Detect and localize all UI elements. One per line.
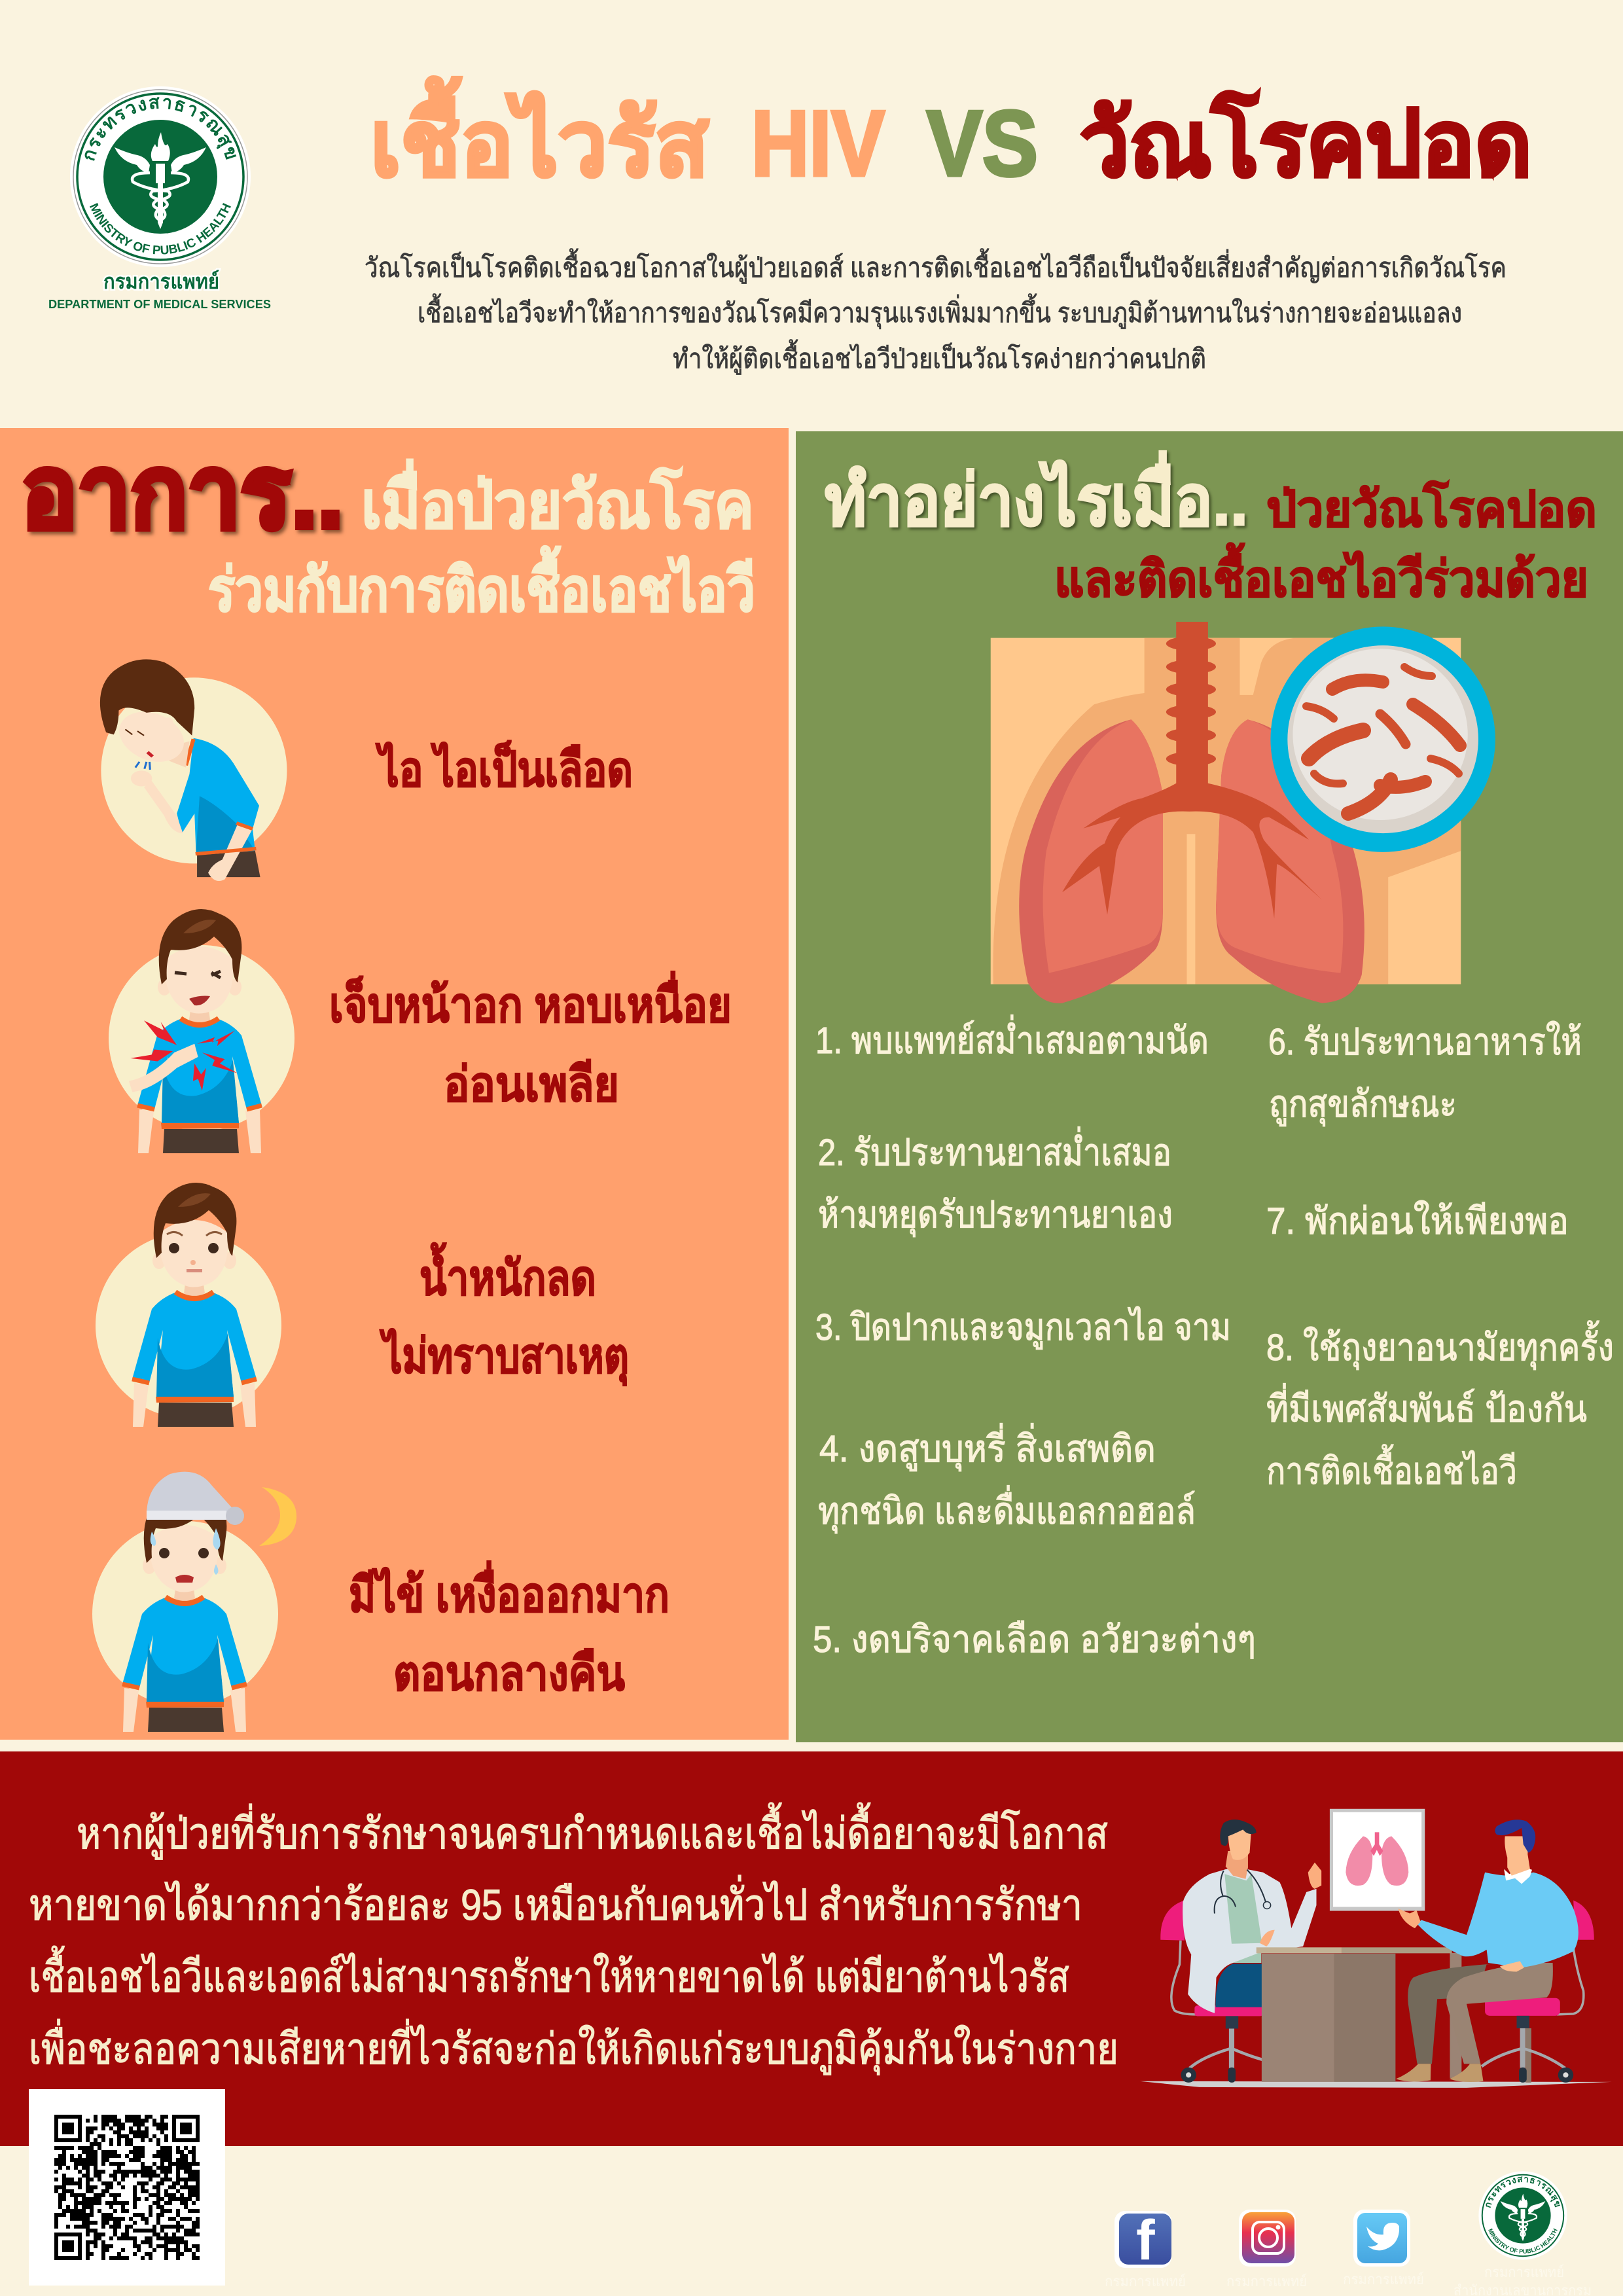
symptom: night sweats and fever: มีไข้ เหงื่อออกมาก [349, 1560, 669, 1622]
icon: twitter [1353, 2210, 1410, 2267]
symptom: night sweats and fever [349, 1560, 669, 1700]
icon: facebook [1115, 2209, 1171, 2272]
icon: facebook: f [1136, 2209, 1155, 2272]
step 8: การติดเชื้อเอชไอวี [1266, 1444, 1517, 1492]
treatment text: เชื้อเอชไอวีและเอดส์ไม่สามารถรักษาให้หายขาดได้ แต่มียาต้านไวรัส [29, 1946, 1069, 2001]
step 7: 7. พักผ่อนให้เพียงพอ [1266, 1200, 1569, 1242]
bacteria [1306, 667, 1460, 814]
desk [1257, 1947, 1461, 2082]
symptom: weight loss: ไม่ทราบสาเหตุ [379, 1327, 629, 1386]
intro text: ทำให้ผู้ติดเชื้อเอชไอวีป่วยเป็นวัณโรคง่ายกว่าคนปกติ [673, 339, 1206, 375]
title: HIV [751, 92, 885, 196]
treatment text: เพื่อชะลอความเสียหายที่ไวรัสจะก่อให้เกิดแก่ระบบภูมิคุ้มกันในร่างกาย [29, 2019, 1118, 2075]
title: เชื้อไวรัส [370, 77, 709, 195]
intro text: เชื้อเอชไอวีจะทำให้อาการของวัณโรคมีความรุนแรงเพิ่มมากขึ้น ระบบภูมิต้านทานในร่างกายจะอ่อนแอลง [418, 293, 1462, 329]
symptoms heading: ร่วมกับการติดเชื้อเอชไอวี [208, 546, 755, 624]
department name thai: กรมการแพทย์ [103, 270, 219, 293]
step 6: ถูกสุขลักษณะ [1269, 1083, 1457, 1127]
step 2: ห้ามหยุดรับประทานยาเอง [818, 1194, 1173, 1238]
illustration: doctor and patient [1140, 1809, 1612, 2088]
caption: instagram: กรมการแพทย์ [1226, 2273, 1307, 2289]
step 5: 5. งดบริจาคเลือด อวัยวะต่างๆ [813, 1619, 1256, 1660]
icon: night sweat boy [92, 1472, 296, 1732]
symptoms heading [21, 436, 755, 624]
QR code [29, 2089, 225, 2286]
treatment text: หายขาดได้มากกว่าร้อยละ 95 เหมือนกับคนทั่วไป สำหรับการรักษา [29, 1875, 1082, 1929]
footer logo [1479, 2172, 1567, 2259]
intro text [365, 248, 1507, 375]
symptom: weight loss: น้ำหนักลด [419, 1242, 596, 1305]
footer logo: กระทรวงสาธารณสุข [1486, 2176, 1560, 2208]
panel: treatment band [0, 1751, 1623, 2146]
symptom: night sweats and fever: ตอนกลางคืน [393, 1646, 625, 1700]
icon: coughing boy [100, 659, 287, 881]
patient [1396, 1820, 1578, 2082]
step 2 [818, 1126, 1173, 1238]
patient chair [1482, 1900, 1594, 2083]
intro text: วัณโรคเป็นโรคติดเชื้อฉวยโอกาสในผู้ป่วยเอดส์ และการติดเชื้อเอชไอวีถือเป็นปัจจัยเสี่ยงสำคัญต่อการเกิดวัณโรค [365, 248, 1507, 284]
step 4: 4. งดสูบบุหรี่ สิ่งเสพติด [819, 1423, 1156, 1472]
step 1: 1. พบแพทย์สม่ำเสมอตามนัด [815, 1014, 1209, 1062]
title: วัณโรคปอด [1080, 91, 1532, 195]
footer logo caption: กรมการแพทย์ [1484, 2264, 1564, 2280]
title [370, 77, 1532, 196]
treatment text [29, 1803, 1118, 2075]
symptom: weight loss [379, 1242, 629, 1386]
panel: symptoms [0, 428, 789, 1740]
what to do heading: ป่วยวัณโรคปอด [1266, 480, 1597, 537]
symptoms heading: อาการ.. [21, 436, 344, 550]
caption: facebook: กรมการแพทย์ [1105, 2273, 1186, 2289]
doctor chair [1160, 1900, 1263, 2083]
step 4 [818, 1423, 1196, 1534]
icon: moon [259, 1487, 296, 1546]
department name english: DEPARTMENT OF MEDICAL SERVICES [48, 298, 271, 311]
step 2: 2. รับประทานยาสม่ำเสมอ [818, 1126, 1171, 1174]
symptoms heading: เมื่อป่วยวัณโรค [361, 459, 754, 542]
symptom: chest pain: อ่อนเพลีย [444, 1057, 619, 1111]
title: VS [927, 92, 1038, 196]
step 4: ทุกชนิด และดื่มแอลกอฮอล์ [818, 1485, 1196, 1534]
department logo [70, 86, 251, 267]
what to do heading [825, 451, 1597, 607]
panel: what to do [796, 431, 1623, 1742]
step 8 [1266, 1321, 1614, 1492]
icon: instagram [1239, 2210, 1296, 2267]
symptom: chest pain: เจ็บหน้าอก หอบเหนื่อย [329, 971, 732, 1032]
doctor [1183, 1820, 1321, 2013]
symptom: cough: ไอ ไอเป็นเลือด [375, 741, 633, 797]
footer logo caption [1454, 2264, 1592, 2296]
lungs illustration [991, 622, 1495, 1003]
poster of lungs [1330, 1809, 1425, 1911]
department logo: กระทรวงสาธารณสุข [85, 97, 237, 161]
icon: boy with chest pain [109, 909, 294, 1153]
step 6 [1268, 1020, 1582, 1127]
step 8: ที่มีเพศสัมพันธ์ ป้องกัน [1266, 1383, 1587, 1430]
what to do heading: ทำอย่างไรเมื่อ.. [825, 451, 1248, 540]
icon: thin boy [96, 1183, 281, 1427]
what to do heading: และติดเชื้อเอชไอวีร่วมด้วย [1054, 543, 1588, 607]
care steps list [813, 1014, 1614, 1660]
caption: twitter: กรมการแพทย์ [1343, 2271, 1424, 2287]
symptom: chest pain [329, 971, 732, 1111]
treatment text: หากผู้ป่วยที่รับการรักษาจนครบกำหนดและเชื้อไม่ดื้อยาจะมีโอกาส [77, 1803, 1108, 1860]
footer logo: MINISTRY OF PUBLIC HEALTH [1488, 2228, 1558, 2253]
step 3: 3. ปิดปากและจมูกเวลาไอ จาม [815, 1306, 1231, 1350]
department logo: MINISTRY OF PUBLIC HEALTH [90, 203, 231, 254]
